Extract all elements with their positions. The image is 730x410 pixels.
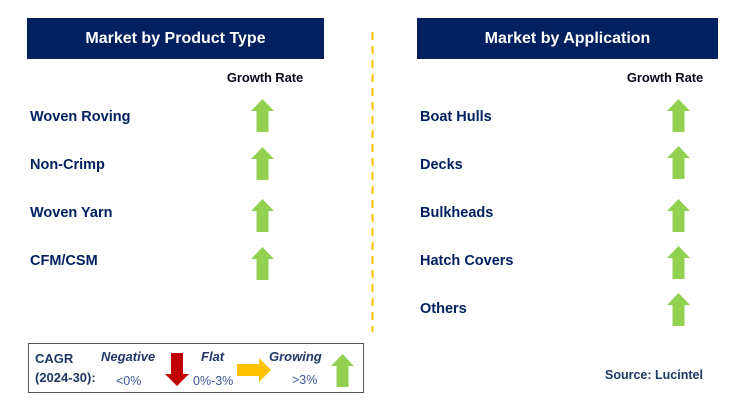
icon: red down arrow	[165, 353, 189, 386]
source note: Source: Lucintel	[605, 368, 703, 382]
icon: growth arrow decks	[667, 146, 690, 179]
label: woven yarn: Woven Yarn	[30, 205, 112, 221]
icon: growth arrow bulkheads	[667, 199, 690, 232]
label: growth rate left: Growth Rate	[227, 70, 303, 85]
label: boat hulls: Boat Hulls	[420, 109, 492, 125]
icon: growth arrow woven roving	[251, 99, 274, 132]
label: growth rate right: Growth Rate	[627, 70, 703, 85]
icon: growth arrow others	[667, 293, 690, 326]
label: bulkheads: Bulkheads	[420, 205, 493, 221]
heading: market by application: Market by Application	[485, 30, 650, 47]
icon: growth arrow woven yarn	[251, 199, 274, 232]
icon: growth arrow cfm/csm	[251, 247, 274, 280]
legend title	[35, 351, 96, 385]
legend title: CAGR	[35, 351, 73, 366]
legend label: growing: Growing	[269, 349, 322, 364]
heading: market by application	[417, 18, 718, 59]
legend: cagr key	[28, 343, 364, 393]
legend title: (2024-30):	[35, 370, 96, 385]
icon: green up arrow	[331, 354, 354, 387]
icon: yellow right arrow	[237, 358, 271, 382]
icon: growth arrow hatch covers	[667, 246, 690, 279]
label: others: Others	[420, 301, 467, 317]
label: decks: Decks	[420, 157, 463, 173]
icon: growth arrow boat hulls	[667, 99, 690, 132]
label: hatch covers: Hatch Covers	[420, 253, 513, 269]
legend label: negative: Negative	[101, 349, 155, 364]
legend value: above three: >3%	[292, 373, 317, 387]
label: non-crimp: Non-Crimp	[30, 157, 105, 173]
legend value: zero to three: 0%-3%	[193, 374, 233, 388]
icon: growth arrow non-crimp	[251, 147, 274, 180]
label: cfm/csm: CFM/CSM	[30, 253, 98, 269]
heading: market by product type: Market by Product Type	[85, 30, 266, 47]
legend value: below zero: <0%	[116, 374, 141, 388]
label: woven roving: Woven Roving	[30, 109, 130, 125]
divider: dashed vertical line	[372, 32, 374, 332]
legend label: flat: Flat	[201, 349, 224, 364]
heading: market by product type	[27, 18, 324, 59]
